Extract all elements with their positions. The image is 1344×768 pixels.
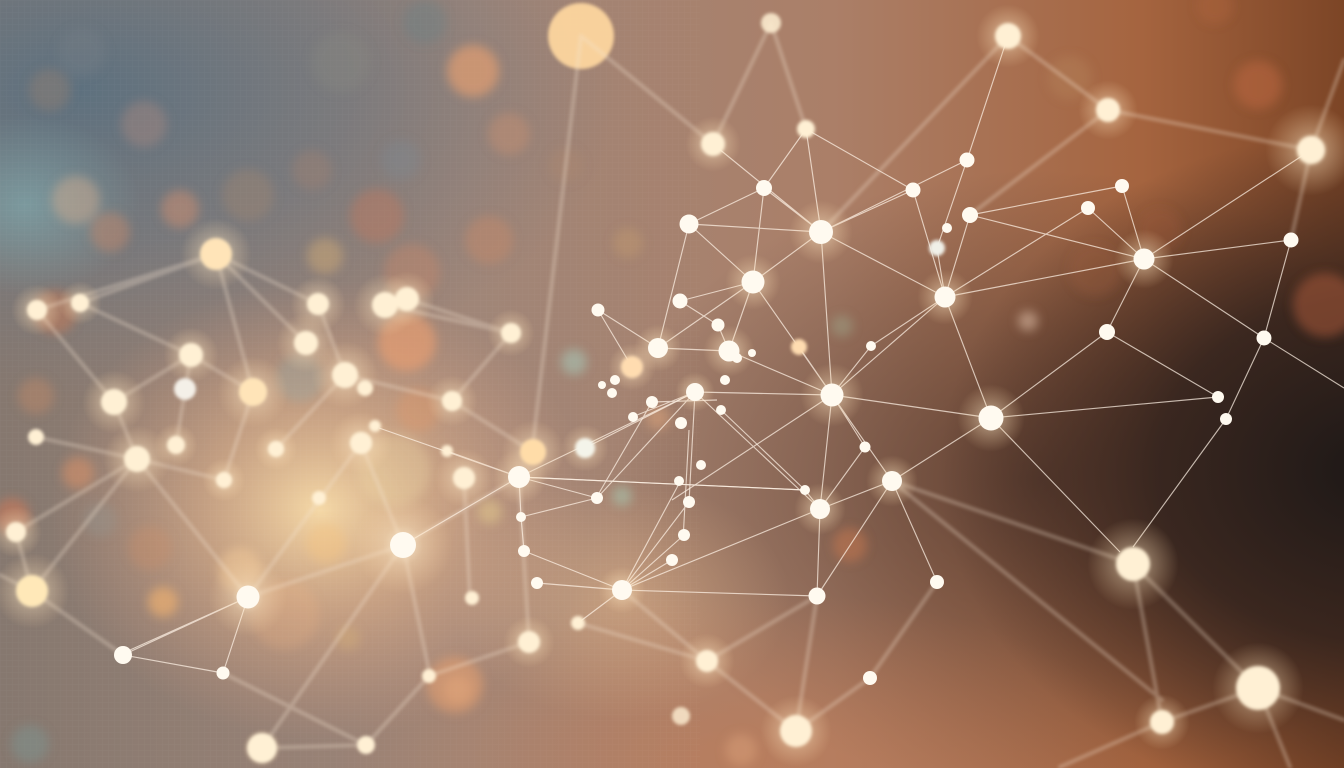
crisp nodes [114, 152, 1298, 685]
large peach orb [548, 3, 614, 69]
thin network links [123, 36, 1344, 673]
